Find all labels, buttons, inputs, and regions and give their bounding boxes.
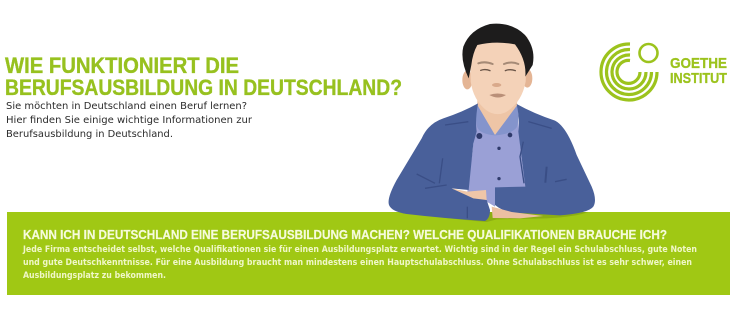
neck [477, 90, 517, 135]
shirt buttons [476, 133, 512, 180]
nose [492, 83, 501, 87]
face [469, 37, 527, 114]
intro text [6, 101, 252, 140]
mouth [489, 93, 506, 97]
jacket fold shadows [417, 122, 567, 218]
hair [462, 24, 533, 78]
title: WIE FUNKTIONIERT DIE [5, 53, 239, 78]
logo mark: concentric arcs and circle [601, 44, 658, 100]
eyebrows and eyes [478, 62, 518, 71]
intro text: Berufsausbildung in Deutschland. [6, 129, 173, 140]
logo wordmark: GOETHE [670, 55, 727, 72]
logo: Goethe-Institut [601, 44, 727, 100]
title: BERUFSAUSBILDUNG IN DEUTSCHLAND? [5, 75, 402, 100]
intro text: Hier finden Sie einige wichtige Informationen zur [6, 115, 252, 126]
banner body text: Ausbildungsplatz zu bekommen. [23, 271, 166, 281]
title [5, 53, 402, 100]
panel: qualifications banner [7, 212, 730, 295]
shirt [467, 110, 526, 207]
arm shadow on banner [400, 212, 588, 222]
banner heading: KANN ICH IN DEUTSCHLAND EINE BERUFSAUSBILDUNG MACHEN? WELCHE QUALIFIKATIONEN BRAUCHE ICH? [23, 227, 667, 242]
shirt collar [476, 105, 519, 135]
banner body text [22, 245, 697, 281]
hands [452, 188, 487, 200]
logo wordmark [670, 55, 727, 87]
ears [462, 71, 472, 89]
jacket [389, 103, 490, 221]
logo wordmark: INSTITUT [670, 70, 727, 87]
illustration: man with folded arms [389, 24, 595, 222]
intro text: Sie möchten in Deutschland einen Beruf lernen? [6, 101, 247, 112]
